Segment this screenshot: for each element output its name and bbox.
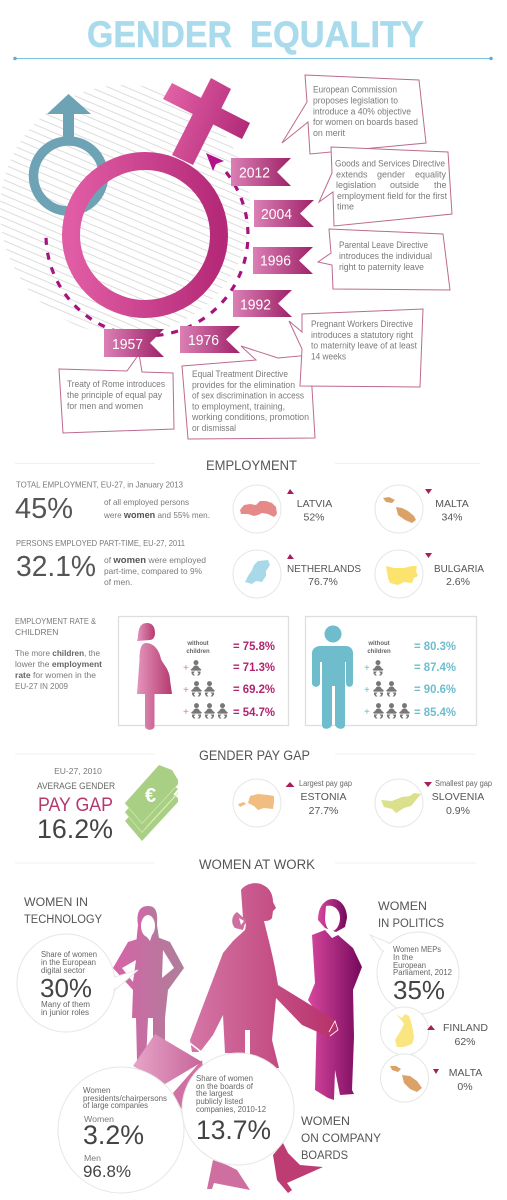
heading: employment: EMPLOYMENT [206, 458, 297, 473]
ribbon: 1957: 1957 [112, 337, 143, 353]
circle: presidents and chairpersons: presidents/chairpersons [83, 1094, 167, 1103]
panel: women employment rate [118, 616, 288, 730]
title [87, 14, 424, 55]
callout: 2004: outside [390, 180, 419, 190]
men rates: = 85.4% [414, 707, 456, 719]
callout: 1996: introduces the individual [339, 251, 432, 261]
callout: 2012 [282, 75, 426, 154]
child icons men [364, 660, 410, 718]
callout: 1976: or dismissal [192, 423, 236, 433]
heading: women at work: WOMEN AT WORK [199, 857, 315, 872]
circle: company boards [182, 1053, 294, 1165]
text: employment rate and children: CHILDREN [15, 627, 58, 637]
child icons women: + [183, 663, 189, 674]
circle: company boards: publicly listed [196, 1097, 243, 1106]
circle: women MEPs [370, 932, 459, 1014]
stat: part-time: of men. [104, 577, 132, 587]
without children label: without [367, 641, 390, 647]
country: Latvia: LATVIA [297, 498, 332, 510]
callout: 1976: Equal Treatment Directive [192, 369, 288, 379]
child icons men: + [364, 707, 370, 718]
ribbon: 2012 [231, 158, 291, 186]
women rates: = 71.3% [233, 662, 275, 674]
timeline dashed arc with arrow [46, 153, 248, 336]
women rates: = 69.2% [233, 684, 275, 696]
callout: 1996 [318, 229, 450, 290]
stat: total employment: of all employed persons [104, 497, 189, 507]
callout: 1957: Treaty of Rome introduces [67, 379, 165, 389]
title rule [13, 57, 493, 60]
title: EQUALITY [250, 14, 424, 55]
country: Bulgaria: 2.6% [446, 576, 470, 588]
text: women in politics: IN POLITICS [378, 918, 444, 930]
text: employment rate and children: EU-27 IN 2009 [15, 681, 68, 691]
text: women in technology: WOMEN IN [24, 897, 88, 909]
stat: total employment: 45% [15, 493, 73, 525]
country: Netherlands: NETHERLANDS [287, 563, 361, 575]
callout: 1957: the principle of equal pay [67, 390, 162, 400]
ribbon: 1976 [180, 326, 240, 353]
country: Finland [380, 1007, 488, 1055]
country: Malta (politics): MALTA [449, 1067, 482, 1079]
ribbon: 1976: 1976 [188, 333, 219, 349]
circle: presidents and chairpersons: of large companies [83, 1101, 148, 1110]
circle: company boards: companies, 2010-12 [196, 1105, 267, 1114]
text: women in technology: TECHNOLOGY [24, 914, 102, 926]
callout: 1976: working conditions, promotion [191, 412, 309, 422]
stat: part-time: of women were employed [104, 555, 206, 566]
country: Netherlands [233, 550, 361, 598]
text: women on company boards: WOMEN [301, 1116, 350, 1128]
callout: 1992 [289, 309, 423, 387]
callout: 1957 [59, 354, 174, 433]
stat: average pay gap: PAY GAP [38, 794, 113, 816]
callout: 1957: for men and women [67, 401, 143, 411]
circle: women MEPs: 35% [393, 975, 445, 1005]
child icons men: + [364, 685, 370, 696]
icon: euro banknotes: € [145, 785, 156, 807]
circle: digital sector: Many of them [41, 1000, 90, 1009]
country: Netherlands: 76.7% [308, 576, 338, 588]
women rates [233, 641, 275, 719]
stat: total employment: were women and 55% men. [103, 510, 210, 521]
callout: 1996: right to paternity leave [339, 262, 424, 272]
country: Malta [375, 485, 469, 533]
silhouette: woman in technology [113, 906, 184, 1062]
ribbon: 1992: 1992 [240, 298, 271, 314]
icon: euro banknotes [125, 765, 178, 841]
panel: women employment rate: children [186, 649, 210, 655]
country: Estonia: ESTONIA [301, 791, 346, 803]
child icons men: + [364, 663, 370, 674]
circle: digital sector: in the European [41, 958, 96, 967]
hatched circle background [0, 85, 250, 335]
ribbon: 1992 [233, 290, 292, 317]
country: Malta: 34% [441, 512, 463, 524]
callout: 1992: 14 weeks [311, 351, 346, 361]
callout: 2004: legislation [336, 180, 376, 190]
icon: pregnant woman [137, 623, 172, 730]
stat: part-time: 32.1% [16, 551, 96, 583]
panel: men employment rate [306, 616, 476, 729]
panel: men employment rate: children [367, 649, 391, 655]
circle: digital sector: Share of women [41, 950, 97, 959]
callout: 1976: provides for the elimination [192, 380, 295, 390]
stat: average pay gap: AVERAGE GENDER [37, 781, 115, 791]
country: Estonia: Largest pay gap [299, 779, 353, 788]
country: Bulgaria: BULGARIA [434, 563, 484, 575]
country: Malta (politics) [380, 1054, 482, 1102]
callout: 2012: proposes legislation to [313, 96, 398, 106]
country: Slovenia: Smallest pay gap [435, 779, 493, 788]
country: Slovenia: SLOVENIA [432, 791, 484, 803]
callout: 1976: to employment, training, [192, 401, 285, 411]
country: Finland: 62% [454, 1036, 476, 1048]
callout: 2012: European Commission [313, 85, 397, 95]
stat: average pay gap: EU-27, 2010 [54, 766, 102, 776]
circle: women MEPs: Women MEPs [393, 945, 441, 954]
men rates: = 80.3% [414, 641, 456, 653]
women rates: = 54.7% [233, 707, 275, 719]
circle: presidents and chairpersons: Women [83, 1086, 110, 1095]
country: Estonia [233, 779, 353, 827]
country: Bulgaria [375, 550, 484, 598]
country: Slovenia [375, 779, 493, 827]
callout: 1976: of sex discrimination in access [192, 391, 304, 401]
text: women on company boards: BOARDS [301, 1150, 348, 1162]
stat: total employment [15, 480, 210, 525]
child icons women: + [183, 685, 189, 696]
stat: total employment: TOTAL EMPLOYMENT, EU-27, in January 2013 [16, 480, 183, 490]
callout: 2004: equality [415, 169, 447, 179]
country: Estonia: 27.7% [309, 805, 338, 817]
without children label: without [186, 641, 209, 647]
title: GENDER [87, 14, 232, 55]
circle: presidents and chairpersons [58, 1067, 184, 1193]
circle: digital sector: 30% [40, 973, 92, 1003]
stat: part-time: part-time, compared to 9% [104, 566, 202, 576]
callout: 1992: introduces a statutory right [311, 330, 413, 340]
text: women in technology [24, 897, 102, 926]
callout: 2004 [319, 147, 452, 226]
icon: briefcase [133, 1034, 202, 1084]
ribbon: 1996: 1996 [260, 254, 291, 270]
silhouette: woman in politics [308, 899, 362, 1100]
callout: 1992: Pregnant Workers Directive [311, 319, 413, 329]
callout: 2004: extends [336, 169, 368, 179]
icon: male symbol [34, 94, 104, 211]
circle: company boards: Share of women [196, 1074, 253, 1083]
circle: digital sector: in junior roles [41, 1008, 89, 1017]
circle: presidents and chairpersons: Men [84, 1153, 101, 1163]
heading: gender pay gap: GENDER PAY GAP [199, 748, 310, 763]
circle: digital sector [17, 934, 138, 1032]
callout: 2004: time [337, 202, 354, 212]
callout: 2012: introduce a 40% objective [313, 106, 411, 116]
ribbon: 2012: 2012 [239, 166, 270, 182]
callout: 1992: to maternity leave of at least [311, 341, 417, 351]
ribbon: 2004 [254, 200, 314, 227]
callout: 2004: employment field for the first [337, 191, 447, 201]
country: Latvia [233, 485, 332, 533]
callout: 2004: Goods and Services Directive [335, 158, 445, 168]
men rates [414, 641, 456, 719]
men rates: = 87.4% [414, 662, 456, 674]
callout: 1976 [182, 346, 315, 439]
stat: average pay gap: 16.2% [37, 814, 113, 844]
text: women in politics: WOMEN [378, 901, 427, 913]
circle: presidents and chairpersons: 3.2% [83, 1120, 144, 1150]
text: women on company boards: ON COMPANY [301, 1133, 381, 1145]
icon: man [312, 626, 353, 729]
circle: company boards: 13.7% [196, 1115, 271, 1145]
women rates: = 75.8% [233, 641, 275, 653]
text: women in politics [378, 901, 444, 930]
circle: digital sector: digital sector [41, 966, 85, 975]
callout: 2004: the [434, 180, 447, 190]
circle: women MEPs: Parliament, 2012 [393, 968, 453, 977]
child icons women: + [183, 707, 189, 718]
text: employment rate and children: rate for women in the [15, 670, 96, 680]
ribbon: 1957 [104, 329, 164, 357]
circle: presidents and chairpersons: Women [84, 1114, 114, 1124]
callout: 2012: for women on boards based [313, 117, 418, 127]
icon: female symbol [71, 78, 250, 309]
stat: average pay gap [37, 766, 115, 844]
country: Finland: FINLAND [443, 1022, 488, 1034]
country: Malta (politics): 0% [457, 1081, 473, 1093]
callout: 2012: on merit [313, 128, 345, 138]
circle: company boards: the largest [196, 1089, 234, 1098]
ribbon: 2004: 2004 [261, 207, 292, 223]
circle: company boards: on the boards of [196, 1082, 254, 1091]
men rates: = 90.6% [414, 684, 456, 696]
circle: women MEPs: In the [393, 953, 414, 962]
country: Slovenia: 0.9% [446, 805, 470, 817]
stat: part-time [16, 538, 206, 587]
circle: presidents and chairpersons: 96.8% [83, 1162, 131, 1181]
callout: 1996: Parental Leave Directive [339, 240, 428, 250]
stat: part-time: PERSONS EMPLOYED PART-TIME, EU-27, 2011 [16, 538, 185, 548]
text: employment rate and children [15, 616, 102, 691]
country: Malta: MALTA [435, 498, 469, 510]
country: Latvia: 52% [303, 512, 325, 524]
text: employment rate and children: The more children, the [15, 648, 100, 658]
text: employment rate and children: EMPLOYMENT RATE & [15, 616, 96, 626]
child icons women [183, 660, 228, 718]
text: women on company boards [301, 1116, 381, 1162]
circle: women MEPs: European [393, 961, 426, 970]
callout: 2004: gender [377, 169, 405, 179]
text: employment rate and children: lower the employment [15, 659, 102, 669]
silhouette: woman on company boards [173, 883, 339, 1193]
ribbon: 1996 [253, 247, 313, 274]
